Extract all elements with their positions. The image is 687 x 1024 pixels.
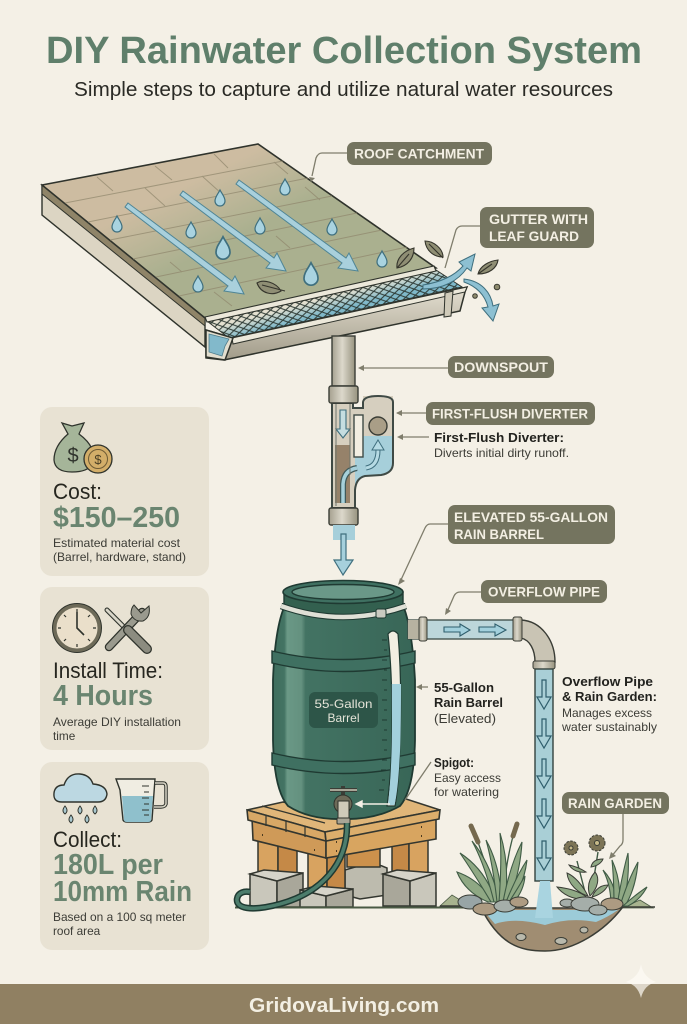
debris dots [473, 284, 500, 298]
water fall [535, 881, 553, 918]
icon: clock and tools [52, 604, 149, 652]
callout: overflow pipe: OVERFLOW PIPE [488, 584, 600, 600]
icon: rain cloud [54, 774, 107, 823]
diverter note: Diverts initial dirty runoff. [434, 446, 569, 460]
stat card: collect [40, 762, 209, 950]
leaf guard mesh [207, 270, 462, 338]
stand apron [252, 818, 326, 858]
icon: money bag: $ [94, 452, 102, 467]
sparkle mark [626, 964, 656, 998]
spigot pointer [356, 801, 390, 807]
callout: elevated barrel [398, 505, 615, 585]
gauge tube [379, 631, 401, 806]
elbow [521, 620, 555, 662]
stones [458, 895, 588, 944]
spigot note: Spigot: [434, 755, 474, 770]
cost heading: Cost: [53, 479, 102, 504]
legs [258, 838, 428, 892]
guard top strip [205, 266, 436, 322]
collect heading: Collect: [53, 827, 122, 852]
roof illustration [42, 144, 500, 360]
overflow horizontal [408, 620, 515, 639]
diverter note [434, 430, 569, 460]
install value: 4 Hours [53, 680, 153, 712]
stat card: collect: 10mm Rain [53, 876, 192, 908]
callout: gutter: GUTTER WITH [489, 211, 588, 227]
cattails [471, 824, 517, 892]
gutter end cap with water [206, 330, 233, 360]
outflow into barrel [333, 525, 355, 540]
upper downspout [332, 336, 355, 386]
rain barrel [237, 580, 415, 908]
cost note: Estimated material cost [53, 536, 181, 550]
stat card: cost: (Barrel, hardware, stand) [53, 550, 186, 564]
ground line left [235, 906, 470, 908]
roof surface [42, 144, 436, 318]
footer band [0, 984, 687, 1024]
barrel note [416, 680, 503, 726]
floating ball [369, 417, 387, 435]
stones right [560, 897, 623, 915]
front blocks [250, 870, 436, 907]
garden hose [237, 823, 347, 908]
callout: first-flush diverter: FIRST-FLUSH DIVERTER [432, 406, 588, 422]
barrel body [273, 603, 415, 819]
back block [345, 862, 387, 899]
down arrows [537, 680, 551, 870]
stand with blocks [247, 797, 440, 907]
downspout and diverter [329, 336, 393, 575]
stat card: cost [40, 407, 209, 576]
barrel bands [272, 651, 415, 774]
callout: first-flush diverter [396, 402, 595, 440]
footer band: GridovaLiving.com [249, 995, 439, 1017]
spigot note: Easy access [434, 771, 501, 785]
gutter front lip [232, 287, 467, 344]
diverter window slot [354, 415, 363, 457]
inner return pipe [343, 468, 357, 503]
barrel note: Rain Barrel [434, 695, 503, 710]
barrel note: 55-Gallon [434, 680, 494, 695]
grass left [457, 833, 527, 902]
overflow note: water sustainably [561, 720, 657, 734]
callout: rain garden [562, 792, 669, 859]
title: DIY Rainwater Collection System [46, 30, 642, 72]
barrel note: (Elevated) [434, 711, 496, 726]
overflow note: Overflow Pipe [562, 674, 653, 689]
leaves [257, 241, 498, 294]
roof fascia side [42, 185, 205, 347]
diverter outline [332, 396, 393, 508]
callout: elevated barrel: ELEVATED 55-GALLON [454, 509, 608, 525]
flowers [557, 835, 608, 899]
barrel lid [284, 592, 403, 615]
callout: downspout: DOWNSPOUT [454, 359, 548, 375]
bolts [262, 827, 422, 851]
barrel ring [281, 606, 406, 617]
diverter fills [333, 396, 393, 508]
overflow arrows at gutter [423, 254, 499, 321]
gutter body [206, 287, 467, 360]
stat card: install time [40, 587, 209, 750]
callout: roof catchment [309, 142, 492, 182]
flow arrows [444, 624, 506, 636]
overflow note: Manages excess [562, 706, 652, 720]
collars [329, 386, 358, 403]
icon: money bag [54, 423, 112, 473]
collect note: Based on a 100 sq meter [53, 910, 186, 924]
shingle lines [65, 154, 407, 306]
callout: gutter [445, 207, 594, 268]
overflow note [561, 674, 657, 734]
barrel label: Barrel [327, 711, 360, 725]
icon: money bag: $ [67, 445, 79, 467]
callout: downspout [358, 356, 554, 378]
spigot note [405, 755, 501, 800]
diverter note: First-Flush Diverter: [434, 430, 564, 445]
barrel label [309, 692, 378, 728]
cost value: $150–250 [53, 502, 180, 534]
spigot note: for watering [434, 785, 499, 799]
grass right [603, 853, 647, 906]
barrel label: 55-Gallon [314, 697, 372, 711]
collect value: 180L per [53, 849, 163, 881]
stat card: collect: roof area [53, 924, 101, 938]
stand top planks [247, 797, 440, 832]
icon: measuring jug [116, 779, 166, 822]
rain garden [440, 824, 655, 951]
vertical pipe [535, 669, 553, 881]
callout: elevated barrel: RAIN BARREL [454, 526, 544, 542]
flow arrows on roof [125, 180, 358, 294]
callout: rain garden: RAIN GARDEN [568, 795, 662, 811]
spigot [330, 786, 357, 824]
install note: Average DIY installation [53, 715, 181, 729]
stat card: install time: time [53, 729, 76, 743]
inner down arrow [336, 410, 350, 438]
overflow pipe [408, 617, 555, 881]
callout: overflow pipe [445, 580, 607, 615]
pond bowl [481, 908, 622, 951]
subtitle: Simple steps to capture and utilize natural water resources [74, 79, 613, 101]
callout: roof catchment: ROOF CATCHMENT [354, 146, 484, 162]
install heading: Install Time: [53, 658, 163, 683]
overflow note: & Rain Garden: [562, 689, 657, 704]
callout: gutter: LEAF GUARD [489, 228, 579, 244]
rain drops [112, 179, 387, 292]
ground [440, 895, 653, 908]
